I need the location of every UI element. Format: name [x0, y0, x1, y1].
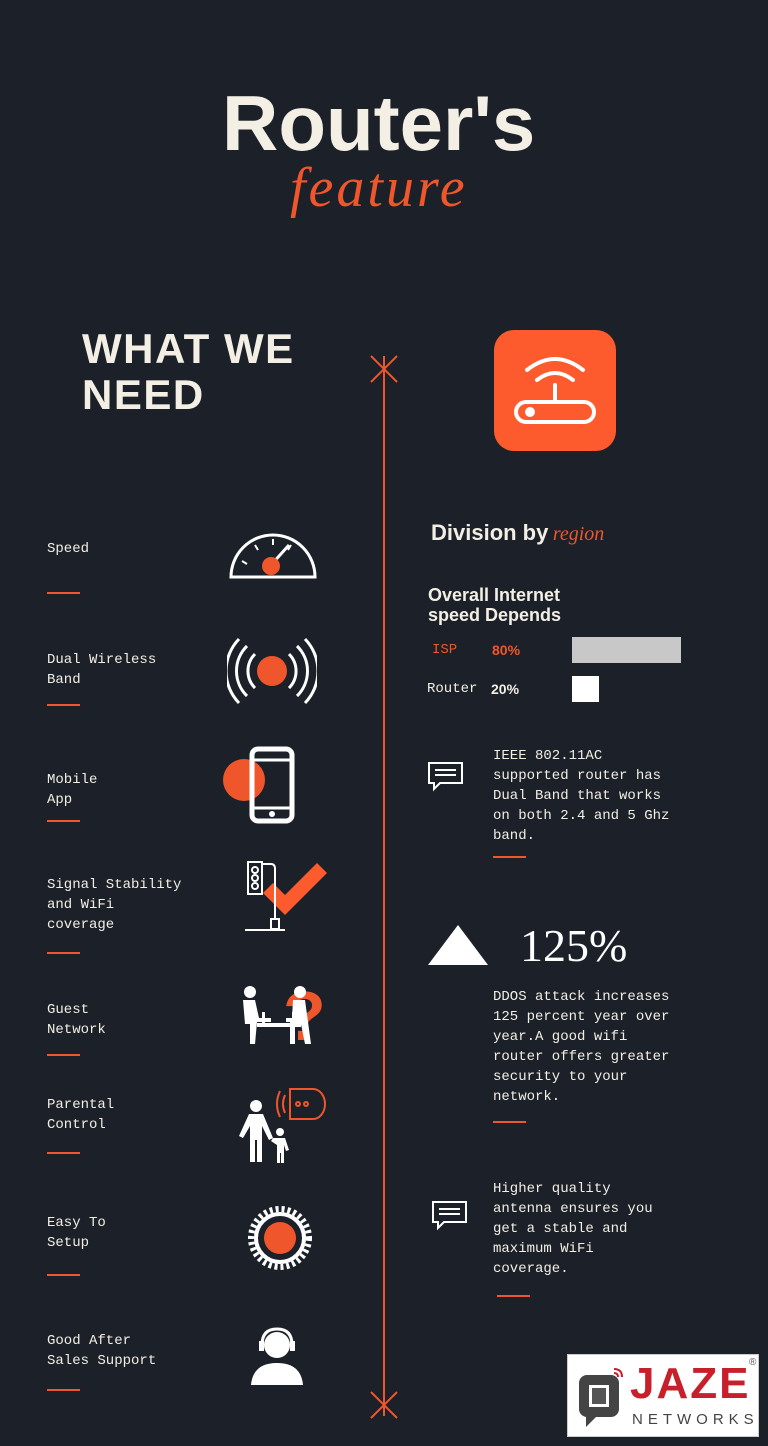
callout: antenna: maximum WiFi — [493, 1241, 594, 1257]
item: parental control: Parental — [47, 1097, 114, 1113]
callout: antenna — [432, 1181, 653, 1297]
logo: jaze networks: ® — [749, 1357, 756, 1368]
heading: division by region: Division by region — [431, 520, 604, 545]
heading: overall internet speed: Overall Internet — [428, 585, 560, 605]
callout: ddos: 125 percent year over — [493, 1009, 669, 1025]
callout: dual band: supported router has — [493, 768, 661, 784]
callout: ddos: DDOS attack increases — [493, 989, 669, 1005]
bar chart: 80% — [492, 642, 520, 658]
callout: ddos — [493, 989, 669, 1123]
title: Router's — [222, 79, 535, 167]
item: speed — [47, 534, 316, 594]
item: guest network: Guest — [47, 1002, 89, 1018]
item: parental control: Control — [47, 1117, 106, 1133]
icon: traffic light check — [245, 861, 327, 931]
logo: jaze networks: JAZE — [630, 1359, 750, 1408]
item: dual wireless band: Dual Wireless — [47, 652, 156, 668]
bar chart: Router — [427, 681, 477, 697]
item: mobile app: Mobile — [47, 772, 97, 788]
title — [222, 79, 535, 219]
item: sales support: Sales Support — [47, 1353, 156, 1369]
item: signal stability: and WiFi — [47, 897, 114, 913]
icon: support agent — [251, 1328, 303, 1385]
item: signal stability: coverage — [47, 917, 114, 933]
title: feature — [290, 157, 468, 219]
icon: phone — [223, 746, 294, 824]
callout: ddos: year.A good wifi — [493, 1029, 627, 1045]
callout: dual band: IEEE 802.11AC — [493, 748, 602, 764]
callout: antenna: antenna ensures you — [493, 1201, 653, 1217]
item: sales support: Good After — [47, 1333, 131, 1349]
callout: dual band: on both 2.4 and 5 Ghz — [493, 808, 669, 824]
heading: overall internet speed: speed Depends — [428, 605, 561, 625]
item: guest network: Network — [47, 1022, 106, 1038]
callout: antenna: Higher quality — [493, 1181, 611, 1197]
callout: dual band: band. — [493, 828, 535, 844]
stat: 125% — [428, 920, 627, 971]
heading: what we need: WHAT WE — [82, 325, 295, 372]
item: sales support — [47, 1328, 303, 1391]
item: mobile app — [47, 746, 294, 824]
callout: dual band — [428, 748, 669, 858]
stat: 125%: 125% — [520, 920, 627, 971]
heading: what we need — [82, 325, 295, 418]
item: parental control — [47, 1088, 326, 1163]
icon: parent child — [239, 1088, 326, 1163]
item: guest network — [47, 984, 325, 1056]
timeline line — [370, 355, 398, 1419]
heading: overall internet speed — [428, 585, 561, 625]
item: easy to setup: Setup — [47, 1235, 89, 1251]
callout: ddos: router offers greater — [493, 1049, 669, 1065]
heading: what we need: NEED — [82, 371, 205, 418]
item: dual wireless band: Band — [47, 672, 81, 688]
item: signal stability: Signal Stability — [47, 877, 181, 893]
item: signal stability — [47, 861, 327, 954]
callout: ddos: security to your — [493, 1069, 627, 1085]
item: easy to setup: Easy To — [47, 1215, 106, 1231]
icon: signal — [227, 638, 317, 704]
icon: guests — [243, 984, 325, 1050]
bar chart: ISP — [432, 642, 457, 658]
callout: antenna: get a stable and — [493, 1221, 627, 1237]
icon: speedometer — [230, 534, 316, 578]
item: speed: Speed — [47, 541, 89, 557]
item: mobile app: App — [47, 792, 72, 808]
icon: chat — [428, 762, 463, 792]
bar chart — [427, 637, 681, 702]
logo: jaze networks: NETWORKS — [632, 1411, 759, 1428]
icon: gear — [248, 1206, 312, 1270]
bar chart: 20% — [491, 681, 519, 697]
callout: antenna: coverage. — [493, 1261, 569, 1277]
icon: router — [494, 330, 616, 451]
icon: chat — [432, 1201, 467, 1230]
callout: dual band: Dual Band that works — [493, 788, 661, 804]
item: easy to setup — [47, 1206, 312, 1276]
item: dual wireless band — [47, 638, 317, 706]
callout: ddos: network. — [493, 1089, 560, 1105]
logo: jaze networks — [567, 1354, 759, 1437]
